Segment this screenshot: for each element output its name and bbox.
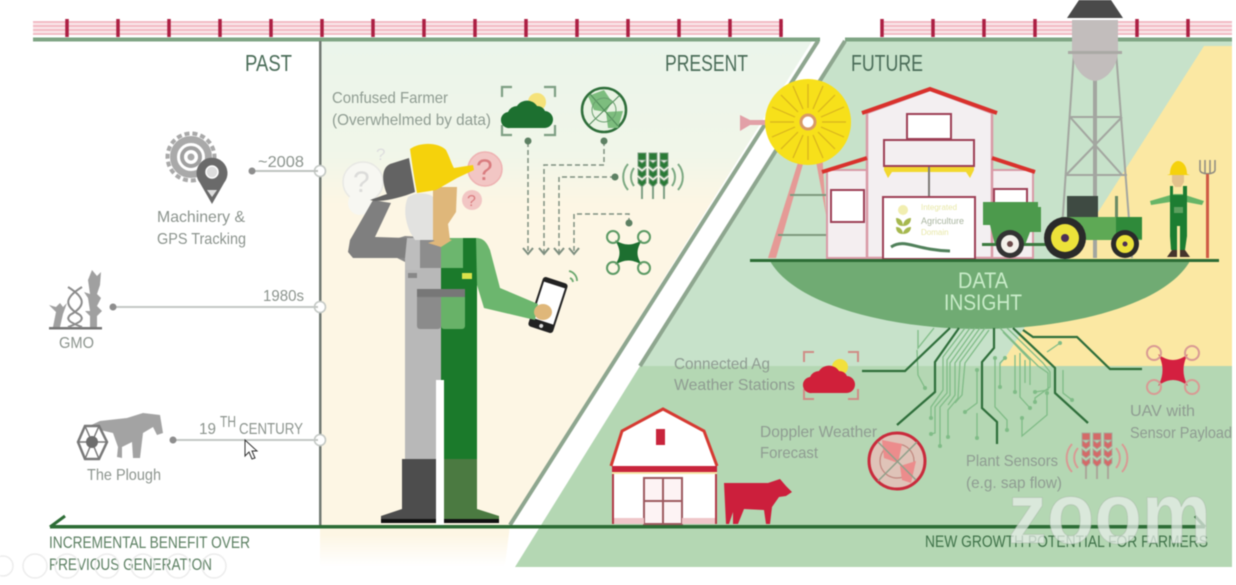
icon: globe (582, 88, 626, 132)
label: connected ag weather stations (674, 356, 795, 394)
label: connected ag weather stations: Weather Stations (674, 377, 795, 394)
milestone: machinery and GPS: ~2008 (258, 154, 304, 171)
label: confused farmer: (Overwhelmed by data) (332, 112, 491, 129)
logo: Integrated (921, 203, 957, 212)
overalls and shirt (362, 236, 441, 262)
icon: red weather cloud (803, 352, 858, 399)
question bubbles: ? (476, 154, 493, 187)
water tower (1060, 0, 1132, 258)
milestone: the plough: CENTURY (239, 421, 303, 438)
small farmer with pitchfork (1150, 160, 1215, 258)
data insight bowl (750, 259, 1219, 329)
label: doppler weather forecast: Forecast (760, 445, 819, 462)
label: plant sensors: Plant Sensors (966, 453, 1058, 470)
label: UAV with sensor payload: UAV with (1130, 403, 1195, 420)
green arm (476, 238, 538, 320)
label: incremental benefit (49, 533, 250, 574)
milestone: machinery and GPS: Machinery & (157, 209, 245, 226)
label: incremental benefit: INCREMENTAL BENEFIT OVER (49, 533, 250, 552)
question bubbles: ? (376, 145, 385, 164)
phone (528, 276, 568, 334)
fence (33, 19, 1232, 42)
player controls (0, 554, 226, 578)
milestone: the plough (78, 413, 318, 484)
icon: cursor (245, 440, 257, 459)
question bubbles: ? (467, 193, 476, 210)
signal (569, 271, 577, 282)
milestone: machinery and GPS (157, 134, 318, 248)
panel: present background (320, 41, 812, 566)
question bubbles: ? (353, 166, 370, 199)
heading: present: PRESENT (665, 50, 748, 76)
head (405, 193, 433, 240)
milestone: the plough: The Plough (87, 467, 161, 484)
icon: drone (607, 231, 650, 274)
data insight bowl: INSIGHT (944, 290, 1022, 315)
milestone: machinery and GPS: GPS Tracking (157, 231, 246, 248)
confused farmer figure (343, 144, 577, 525)
label: plant sensors: (e.g. sap flow) (966, 475, 1062, 492)
windmill (740, 79, 851, 258)
label: doppler weather forecast (760, 424, 878, 462)
logo (891, 203, 964, 251)
icon: wheat sensor (623, 153, 683, 199)
cap (370, 158, 415, 201)
large barn (822, 89, 1035, 259)
milestone: GMO: GMO (59, 335, 94, 352)
icon: red cow (724, 479, 792, 524)
milestone: the plough: 19 (199, 421, 216, 438)
circuit roots (862, 328, 1142, 448)
tractor and wagon (982, 196, 1142, 259)
boots (381, 459, 436, 523)
data flow arrows (523, 138, 632, 254)
icon: red drone (1147, 346, 1199, 394)
label: UAV with sensor payload (1130, 403, 1232, 442)
label: confused farmer (332, 90, 491, 129)
icon: weather cloud (501, 87, 555, 135)
gray arm (348, 200, 407, 258)
label: connected ag weather stations: Connected Ag (674, 356, 770, 373)
data insight bowl: DATA (958, 268, 1008, 293)
small red barn (611, 409, 717, 524)
milestone: the plough: TH (220, 414, 236, 431)
heading: future: FUTURE (851, 50, 923, 76)
icon: red wheat sensor (1067, 433, 1127, 479)
benefit axis (50, 516, 1205, 528)
logo: Agriculture (921, 216, 964, 226)
heading: past: PAST (245, 50, 292, 76)
question bubbles (343, 145, 502, 215)
label: confused farmer: Confused Farmer (332, 90, 449, 107)
milestone: GMO: 1980s (263, 288, 304, 305)
hand (534, 304, 552, 320)
timeline axis (314, 41, 326, 525)
icon: red radar globe (869, 433, 925, 489)
zoom watermark: zoom (1008, 466, 1211, 562)
label: doppler weather forecast: Doppler Weather (760, 424, 878, 441)
label: incremental benefit: PREVIOUS GENERATION (49, 555, 212, 574)
milestone: GMO (49, 270, 318, 352)
label: plant sensors (966, 453, 1062, 492)
logo: Domain (921, 228, 949, 237)
panel: future background (515, 41, 1232, 567)
divider: diagonal lines between present and future (510, 41, 845, 525)
